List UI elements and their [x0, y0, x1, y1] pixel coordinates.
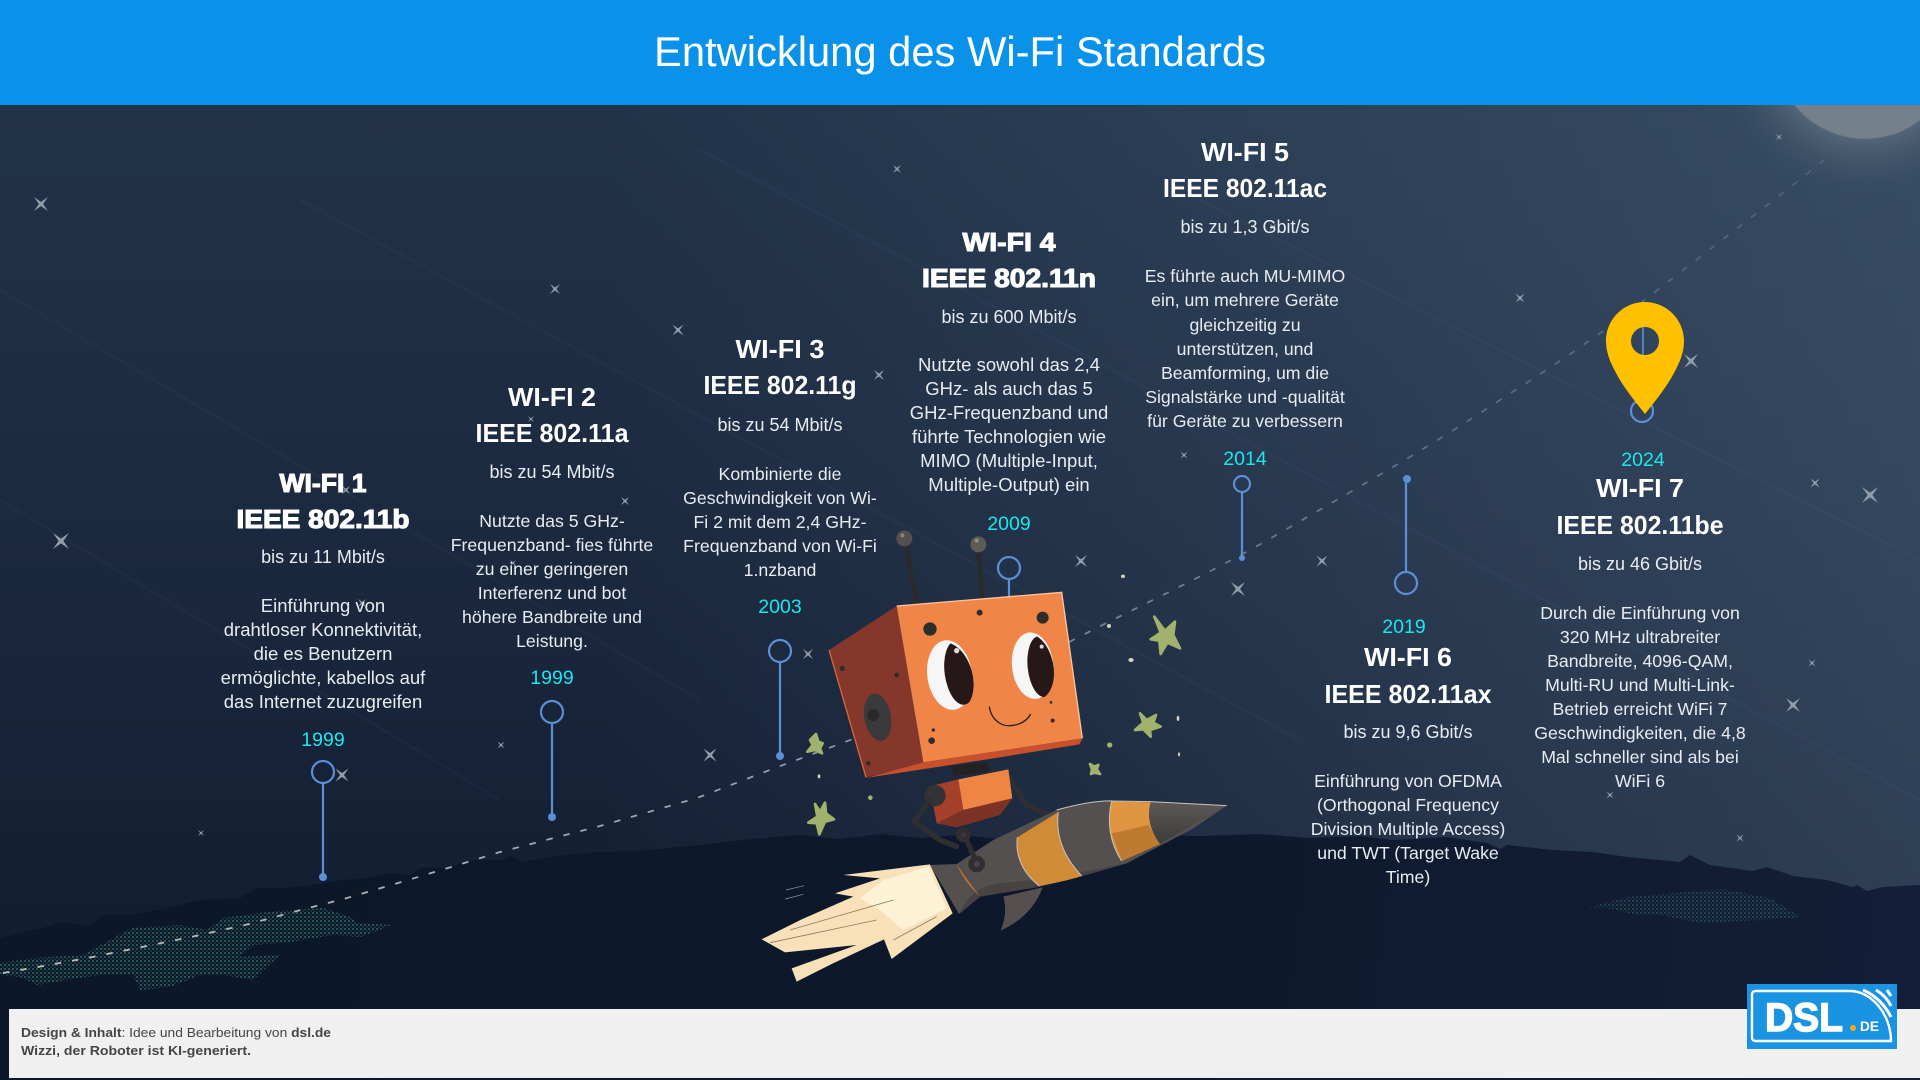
description: Fi 2 mit dem 2,4 GHz- — [694, 512, 867, 532]
credit text — [21, 1025, 331, 1058]
heading: WI-FI 5 — [1201, 137, 1289, 167]
header bar — [0, 0, 1920, 105]
credit text: Design & Inhalt : Idee und Bearbeitung von dsl.de — [21, 1025, 331, 1040]
heading: WI-FI 7 — [1596, 473, 1684, 503]
description: WiFi 6 — [1615, 771, 1665, 791]
description: Bandbreite, 4096-QAM, — [1547, 651, 1733, 671]
description: die es Benutzern — [254, 643, 392, 664]
description: Es führte auch MU-MIMO — [1145, 266, 1345, 286]
heading: IEEE 802.11ax — [1324, 679, 1492, 709]
description — [451, 511, 653, 651]
timeline marker — [312, 761, 334, 881]
description: Frequenzband- fies führte — [451, 535, 653, 555]
timeline marker — [541, 701, 563, 821]
heading — [704, 334, 856, 400]
description: Einführung von — [261, 595, 385, 616]
description: Beamforming, um die — [1161, 363, 1329, 383]
icon: location pin — [1606, 302, 1684, 414]
description: unterstützen, und — [1177, 339, 1313, 359]
year: 1999 — [530, 667, 574, 689]
sparkle dots — [818, 575, 1180, 800]
description — [683, 464, 877, 580]
description: Mal schneller sind als bei — [1541, 747, 1739, 767]
description: Frequenzband von Wi-Fi — [683, 536, 877, 556]
ground glitter — [0, 889, 1800, 990]
heading: IEEE 802.11be — [1556, 510, 1724, 540]
robot head — [829, 592, 1082, 778]
heading: IEEE 802.11g — [704, 370, 856, 400]
robot arm and leg — [914, 800, 982, 870]
speed: bis zu 46 Gbit/s — [1578, 554, 1702, 574]
description: 320 MHz ultrabreiter — [1560, 627, 1720, 647]
description: höhere Bandbreite und — [462, 607, 642, 627]
description: Nutzte das 5 GHz- — [479, 511, 625, 531]
speed: bis zu 600 Mbit/s — [941, 307, 1077, 327]
year: 2014 — [1223, 448, 1267, 470]
dashed trajectory line — [3, 153, 1833, 973]
column: Wi-Fi 2 — [451, 382, 653, 821]
description: das Internet zuzugreifen — [224, 691, 422, 712]
heading — [476, 382, 629, 448]
column: Wi-Fi 4 — [910, 227, 1108, 605]
heading — [1163, 137, 1327, 203]
description — [1145, 266, 1345, 431]
column: Wi-Fi 7 — [1534, 302, 1746, 791]
speaker — [860, 691, 895, 743]
timeline marker — [1234, 476, 1250, 561]
description: führte Technologien wie — [912, 426, 1106, 447]
column: Wi-Fi 5 — [1145, 137, 1345, 561]
description: GHz- als auch das 5 — [925, 378, 1093, 399]
logo: DSL.de — [1747, 984, 1897, 1049]
heading — [236, 468, 410, 534]
heading — [1556, 473, 1724, 540]
rocket body — [930, 801, 1227, 914]
column: Wi-Fi 1 — [221, 468, 426, 881]
description: Division Multiple Access) — [1311, 819, 1505, 839]
description: Nutzte sowohl das 2,4 — [918, 354, 1100, 375]
flames — [762, 864, 953, 982]
description — [1534, 603, 1746, 791]
logo: DSL.de: DE — [1860, 1018, 1879, 1034]
description: Betrieb erreicht WiFi 7 — [1553, 699, 1727, 719]
description: Time) — [1386, 867, 1430, 887]
description: und TWT (Target Wake — [1317, 843, 1499, 863]
description: GHz-Frequenzband und — [910, 402, 1108, 423]
heading: WI-FI 1 — [280, 468, 366, 498]
description: für Geräte zu verbessern — [1147, 411, 1343, 431]
year: 2019 — [1382, 616, 1426, 638]
mouth — [989, 707, 1031, 726]
description: ein, um mehrere Geräte — [1151, 290, 1339, 310]
description: Multi-RU und Multi-Link- — [1545, 675, 1735, 695]
description — [1311, 771, 1505, 887]
speed: bis zu 1,3 Gbit/s — [1180, 217, 1310, 237]
year: 1999 — [301, 729, 345, 751]
description: Signalstärke und -qualität — [1145, 387, 1345, 407]
description: Durch die Einführung von — [1540, 603, 1740, 623]
description: (Orthogonal Frequency — [1317, 795, 1499, 815]
logo: DSL.de: DSL — [1765, 996, 1843, 1040]
description: Geschwindigkeit von Wi- — [683, 488, 877, 508]
antennas — [896, 530, 986, 603]
year: 2009 — [987, 513, 1031, 535]
description: Interferenz und bot — [478, 583, 626, 603]
eyes — [927, 632, 1054, 710]
speed: bis zu 54 Mbit/s — [489, 462, 615, 482]
description: gleichzeitig zu — [1189, 315, 1301, 335]
heading — [1324, 642, 1492, 709]
description: Einführung von OFDMA — [1314, 771, 1502, 791]
heading: IEEE 802.11a — [476, 418, 629, 448]
speed: bis zu 11 Mbit/s — [261, 547, 385, 567]
column: Wi-Fi 6 — [1311, 475, 1505, 887]
description: 1.nzband — [744, 560, 816, 580]
heading — [922, 227, 1096, 293]
description: Kombinierte die — [719, 464, 842, 484]
title: Entwicklung des Wi-Fi Standards — [654, 28, 1266, 75]
credit text: Wizzi, der Roboter ist KI-generiert. — [21, 1043, 251, 1058]
description: ermöglichte, kabellos auf — [221, 667, 426, 688]
heading: IEEE 802.11b — [236, 504, 410, 534]
heading: WI-FI 6 — [1364, 642, 1452, 672]
back legs / neck — [952, 762, 989, 776]
robot torso — [924, 769, 1012, 827]
description: zu einer geringeren — [476, 559, 628, 579]
fin — [1001, 887, 1043, 931]
timeline marker — [1395, 475, 1417, 594]
rocket bands — [1017, 812, 1082, 886]
heading: IEEE 802.11ac — [1163, 173, 1327, 203]
year: 2003 — [758, 596, 802, 618]
footer panel — [9, 1009, 1920, 1078]
green stars — [807, 617, 1180, 834]
heading: IEEE 802.11n — [922, 263, 1096, 293]
heading: WI-FI 2 — [508, 382, 596, 412]
screws — [840, 610, 1055, 766]
mountain silhouette — [0, 834, 1920, 1080]
timeline marker — [998, 557, 1020, 605]
description: Leistung. — [516, 631, 588, 651]
timeline marker — [769, 640, 791, 760]
column: Wi-Fi 3 — [683, 334, 877, 760]
speed: bis zu 54 Mbit/s — [717, 415, 843, 435]
description — [221, 595, 426, 712]
description: Geschwindigkeiten, die 4,8 — [1534, 723, 1746, 743]
year: 2024 — [1621, 449, 1665, 471]
description: MIMO (Multiple-Input, — [920, 450, 1098, 471]
stars — [34, 134, 1878, 842]
speed: bis zu 9,6 Gbit/s — [1343, 722, 1473, 742]
heading: WI-FI 3 — [736, 334, 824, 364]
illustration: robot riding a rocket — [762, 530, 1227, 982]
description — [910, 354, 1108, 495]
description: Multiple-Output) ein — [928, 474, 1090, 495]
timeline marker — [1631, 400, 1653, 422]
heading: WI-FI 4 — [962, 227, 1056, 257]
description: drahtloser Konnektivität, — [224, 619, 422, 640]
